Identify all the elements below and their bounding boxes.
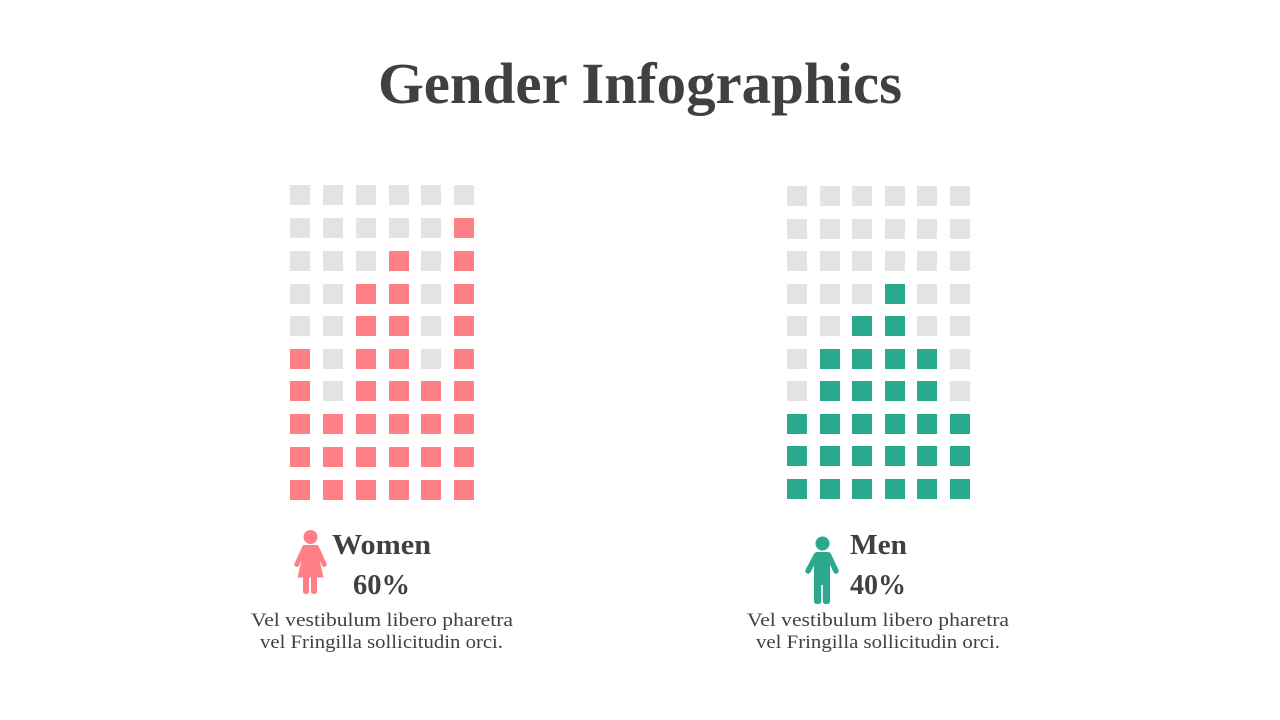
description: women: vel Fringilla sollicitudin orci.: [260, 632, 503, 653]
label: men: Men: [850, 530, 907, 561]
value: 40%: 40%: [850, 570, 906, 601]
panel: men: [747, 186, 1010, 653]
waffle chart: women 60%: [290, 185, 474, 500]
label: women: Women: [332, 530, 431, 561]
panel: women: [251, 185, 514, 653]
title: Gender Infographics: [378, 51, 902, 116]
description: men: [747, 610, 1010, 653]
description: men: Vel vestibulum libero pharetra: [747, 610, 1010, 631]
description: women: [251, 610, 514, 653]
value: 60%: 60%: [353, 570, 410, 601]
icon: man: [808, 536, 836, 604]
waffle chart: men 40%: [787, 186, 970, 499]
description: women: Vel vestibulum libero pharetra: [251, 610, 514, 631]
description: men: vel Fringilla sollicitudin orci.: [756, 632, 1000, 653]
icon: woman: [297, 530, 324, 594]
